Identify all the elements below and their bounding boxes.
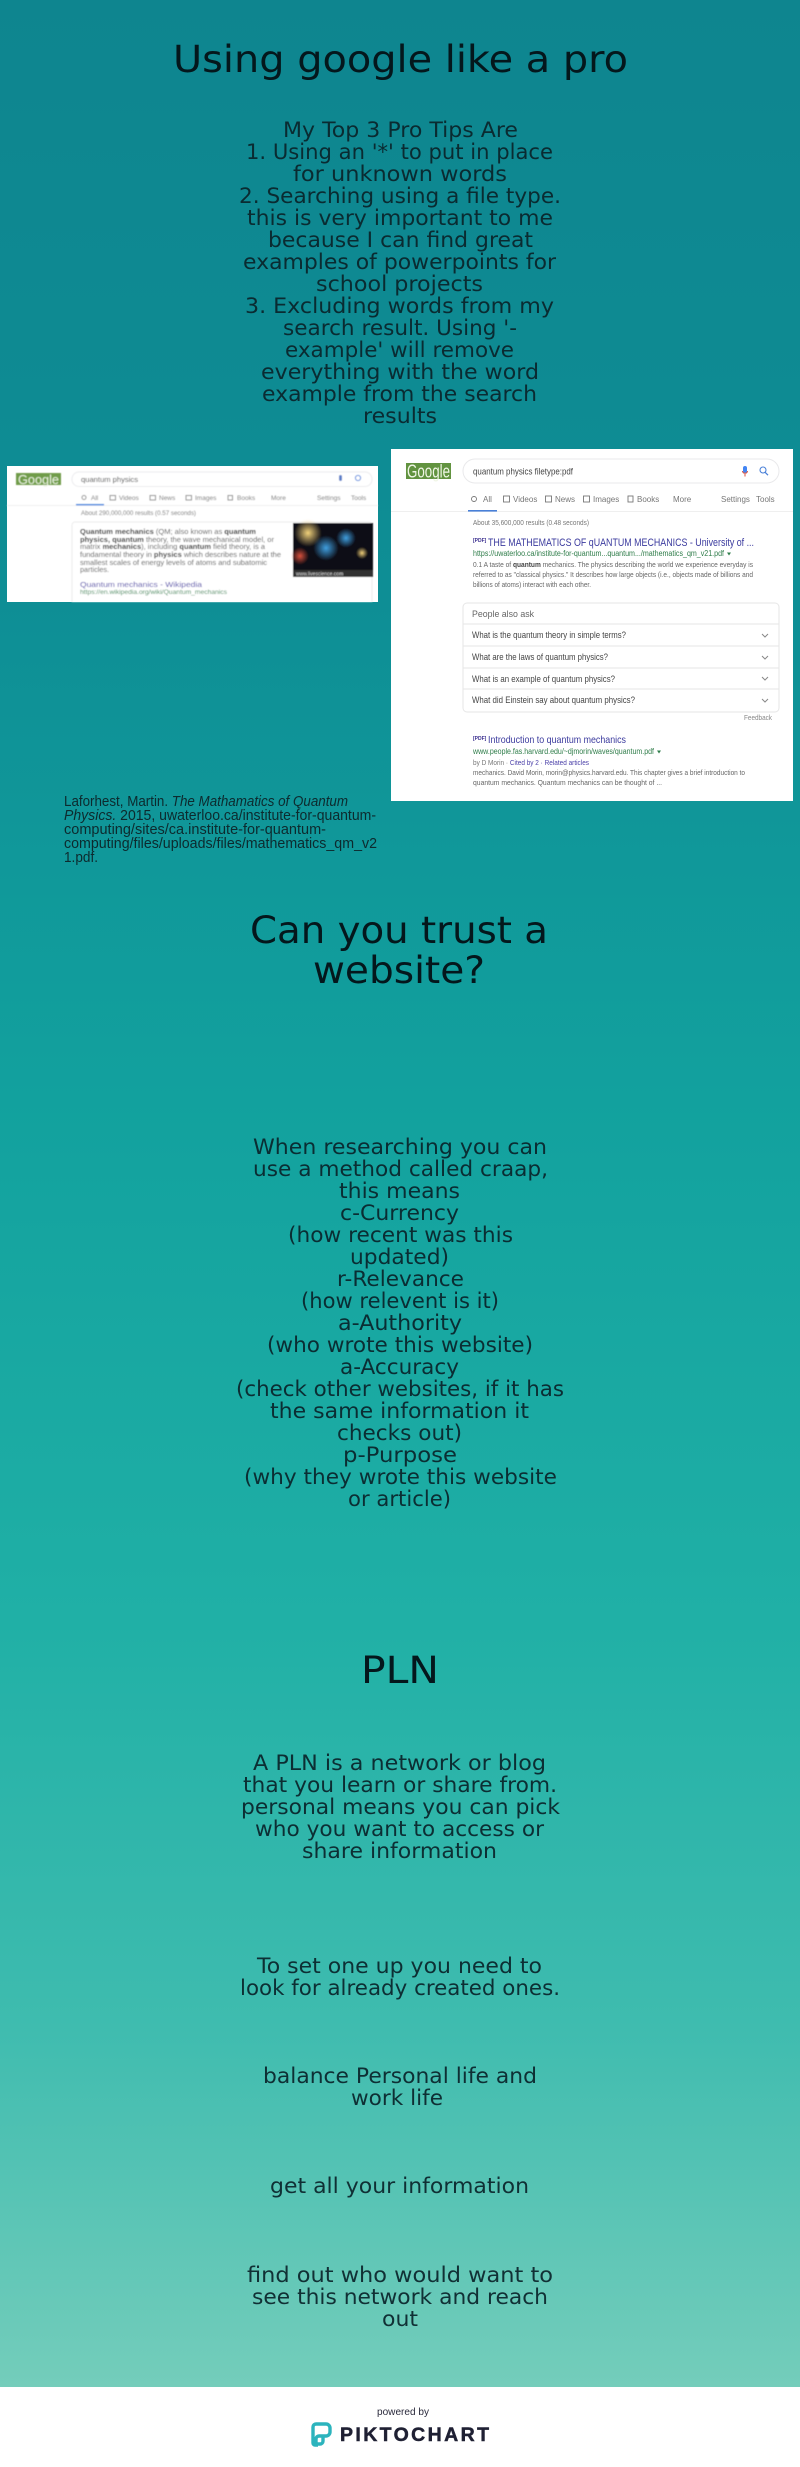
- text block: craap method: checks out): [337, 1421, 462, 1445]
- screenshot: google search filetype pdf: [PDF]: [473, 736, 487, 742]
- text block: top 3 pro tips: results: [363, 404, 437, 428]
- screenshot: google search filetype pdf: Introduction to quantum mechanics: [488, 734, 626, 746]
- text block: craap method: a-Accuracy: [340, 1355, 459, 1379]
- screenshot: google search filetype pdf: [PDF]: [473, 538, 487, 544]
- text block: top 3 pro tips: 3. Excluding words from my: [245, 294, 554, 318]
- text block: find out who: [247, 2263, 553, 2331]
- screenshot: google search quantum physics: Images: [195, 495, 217, 502]
- text block: find out who: see this network and reach: [252, 2285, 548, 2309]
- text block: top 3 pro tips: My Top 3 Pro Tips Are: [283, 118, 518, 142]
- text block: what a PLN is: share information: [302, 1839, 497, 1863]
- screenshot: google search quantum physics: physics, quantum theory, the wave mechanical model, or: [80, 537, 275, 544]
- citation: computing/files/uploads/files/mathematics_qm_v2: [64, 835, 377, 852]
- heading: can you trust a website: [250, 909, 548, 992]
- screenshot: google search filetype pdf: About 35,600,000 results (0.48 seconds): [473, 518, 589, 527]
- screenshot: google search quantum physics: Books: [237, 495, 256, 502]
- text block: top 3 pro tips: everything with the word: [261, 360, 539, 384]
- people also ask box: What is an example of quantum physics?: [472, 674, 615, 685]
- text block: craap method: (check other websites, if it has: [236, 1377, 564, 1401]
- text block: craap method: use a method called craap,: [253, 1157, 548, 1181]
- screenshot: google search quantum physics: Tools: [351, 495, 367, 502]
- icon: piktochart logo: [313, 2424, 330, 2445]
- text block: craap method: (why they wrote this website: [244, 1465, 557, 1489]
- screenshot: google search filetype pdf: quantum mechanics. Quantum mechanics can be thought of ...: [473, 778, 662, 787]
- citation: Physics. 2015, uwaterloo.ca/institute-for-quantum-: [64, 807, 376, 824]
- text block: set one up: look for already created ones.: [240, 1976, 560, 2000]
- text block: get information: get all your information: [270, 2174, 529, 2198]
- heading: PLN: PLN: [361, 1649, 439, 1692]
- text block: top 3 pro tips: school projects: [316, 272, 483, 296]
- screenshot: google search filetype pdf: Books: [637, 495, 659, 504]
- citation: Laforhest, Martin. The Mathamatics of Quantum: [64, 793, 348, 810]
- screenshot: google search filetype pdf: News: [555, 495, 575, 504]
- screenshot: google search filetype pdf: by D Morin · Cited by 2 · Related articles: [473, 758, 589, 767]
- text block: top 3 pro tips: example' will remove: [285, 338, 514, 362]
- screenshot: google search filetype pdf: Feedback: [744, 715, 772, 722]
- text block: top 3 pro tips: this is very important to me: [247, 206, 553, 230]
- text block: top 3 pro tips: [239, 118, 561, 428]
- text block: craap method: (how recent was this: [288, 1223, 513, 1247]
- screenshot: google search filetype pdf: billions of atoms) interact with each other.: [473, 580, 591, 589]
- footer: powered by piktochart: powered by: [377, 2406, 430, 2418]
- screenshot: google search quantum physics: matrix mechanics ), including quantum field theory, is a: [80, 544, 265, 551]
- people also ask box: What did Einstein say about quantum physics?: [472, 695, 635, 706]
- screenshot: google search filetype pdf: www.people.fas.harvard.edu/~djmorin/waves/quantum.pdf: [472, 747, 655, 756]
- screenshot: google search quantum physics: Videos: [119, 495, 140, 502]
- screenshot: google search quantum physics: smallest scales of energy levels of atoms and subatomic: [80, 560, 268, 567]
- screenshot: google search filetype pdf: [391, 449, 793, 801]
- title: Using google like a pro: [173, 38, 628, 81]
- text block: top 3 pro tips: example from the search: [262, 382, 537, 406]
- screenshot: google search filetype pdf: More: [673, 495, 692, 504]
- screenshot: google search filetype pdf: quantum physics filetype:pdf: [473, 466, 573, 478]
- text block: craap method: the same information it: [270, 1399, 529, 1423]
- people also ask box: What is the quantum theory in simple terms?: [472, 630, 626, 641]
- screenshot: google search filetype pdf: Google: [407, 462, 450, 482]
- text block: what a PLN is: who you want to access or: [255, 1817, 544, 1841]
- citation: computing/sites/ca.institute-for-quantum-: [64, 821, 326, 838]
- screenshot: google search quantum physics: About 290,000,000 results (0.57 seconds): [81, 510, 196, 517]
- text block: top 3 pro tips: search result. Using '-: [283, 316, 517, 340]
- screenshot: google search filetype pdf: 0.1 A taste of quantum mechanics. The physics describing the world we experience everyday is: [473, 560, 753, 569]
- text block: craap method: (how relevent is it): [301, 1289, 499, 1313]
- people also ask box: [463, 603, 779, 712]
- screenshot: google search filetype pdf: All: [483, 495, 492, 504]
- text block: top 3 pro tips: 2. Searching using a file type.: [239, 184, 561, 208]
- people also ask box: What are the laws of quantum physics?: [472, 652, 608, 663]
- text block: balance life: [263, 2064, 537, 2110]
- screenshot: google search quantum physics: [7, 466, 378, 602]
- screenshot: google search quantum physics: fundamental theory in physics which describes nature at the: [80, 552, 281, 559]
- text block: top 3 pro tips: for unknown words: [293, 162, 507, 186]
- text block: find out who: out: [382, 2307, 418, 2331]
- text block: balance life: work life: [351, 2086, 443, 2110]
- screenshot: google search quantum physics: Quantum mechanics - Wikipedia: [80, 580, 203, 589]
- text block: what a PLN is: [241, 1751, 561, 1863]
- image: quantum thumbnail: [291, 519, 373, 578]
- image: quantum thumbnail: www.livescience.com: [296, 572, 343, 578]
- screenshot: google search quantum physics: Settings: [317, 495, 341, 502]
- heading: can you trust a website: Can you trust a: [250, 909, 548, 952]
- footer: powered by piktochart: PIKTOCHART: [340, 2424, 489, 2446]
- text block: what a PLN is: personal means you can pick: [241, 1795, 561, 1819]
- screenshot: google search filetype pdf: Images: [593, 495, 619, 504]
- screenshot: google search quantum physics: More: [271, 495, 286, 502]
- people also ask box: People also ask: [472, 609, 534, 620]
- screenshot: google search quantum physics: Google: [18, 472, 59, 487]
- text block: craap method: updated): [350, 1245, 449, 1269]
- citation: [64, 793, 377, 866]
- text block: craap method: this means: [339, 1179, 460, 1203]
- text block: top 3 pro tips: because I can find great: [268, 228, 533, 252]
- text block: craap method: [236, 1135, 564, 1511]
- text block: set one up: [240, 1954, 560, 2000]
- screenshot: google search quantum physics: quantum physics: [81, 475, 138, 484]
- text block: craap method: c-Currency: [340, 1201, 459, 1225]
- text block: find out who: find out who would want to: [247, 2263, 553, 2287]
- heading: can you trust a website: website?: [313, 949, 485, 992]
- text block: top 3 pro tips: examples of powerpoints for: [243, 250, 556, 274]
- screenshot: google search filetype pdf: referred to as "classical physics." It describes how large objects (i.e., objects made of billions and: [473, 570, 753, 579]
- screenshot: google search quantum physics: particles.: [80, 567, 109, 574]
- text block: craap method: a-Authority: [338, 1311, 462, 1335]
- screenshot: google search quantum physics: News: [159, 495, 176, 502]
- text block: set one up: To set one up you need to: [256, 1954, 542, 1978]
- screenshot: google search filetype pdf: https://uwaterloo.ca/institute-for-quantum...quantum.../mathematics_qm_v21.pdf: [473, 549, 725, 558]
- screenshot: google search filetype pdf: Tools: [756, 495, 775, 504]
- text block: what a PLN is: A PLN is a network or blog: [253, 1751, 546, 1775]
- text block: craap method: or article): [348, 1487, 451, 1511]
- screenshot: google search filetype pdf: Settings: [721, 495, 750, 504]
- text block: balance life: balance Personal life and: [263, 2064, 537, 2088]
- screenshot: google search filetype pdf: mechanics. David Morin, morin@physics.harvard.edu. This chapter gives a brief introduction to: [473, 768, 745, 777]
- text block: top 3 pro tips: 1. Using an '*' to put in place: [246, 140, 553, 164]
- text block: craap method: When researching you can: [253, 1135, 547, 1159]
- text block: craap method: r-Relevance: [337, 1267, 464, 1291]
- screenshot: google search quantum physics: Quantum mechanics (QM; also known as quantum: [80, 529, 256, 536]
- screenshot: google search filetype pdf: Videos: [513, 495, 537, 504]
- text block: craap method: p-Purpose: [343, 1443, 457, 1467]
- screenshot: google search quantum physics: https://en.wikipedia.org/wiki/Quantum_mechanics: [80, 590, 227, 596]
- text block: craap method: (who wrote this website): [267, 1333, 533, 1357]
- screenshot: google search quantum physics: All: [91, 495, 99, 502]
- footer: powered by piktochart: [0, 2387, 800, 2467]
- citation: 1.pdf.: [64, 849, 98, 866]
- text block: what a PLN is: that you learn or share from.: [243, 1773, 557, 1797]
